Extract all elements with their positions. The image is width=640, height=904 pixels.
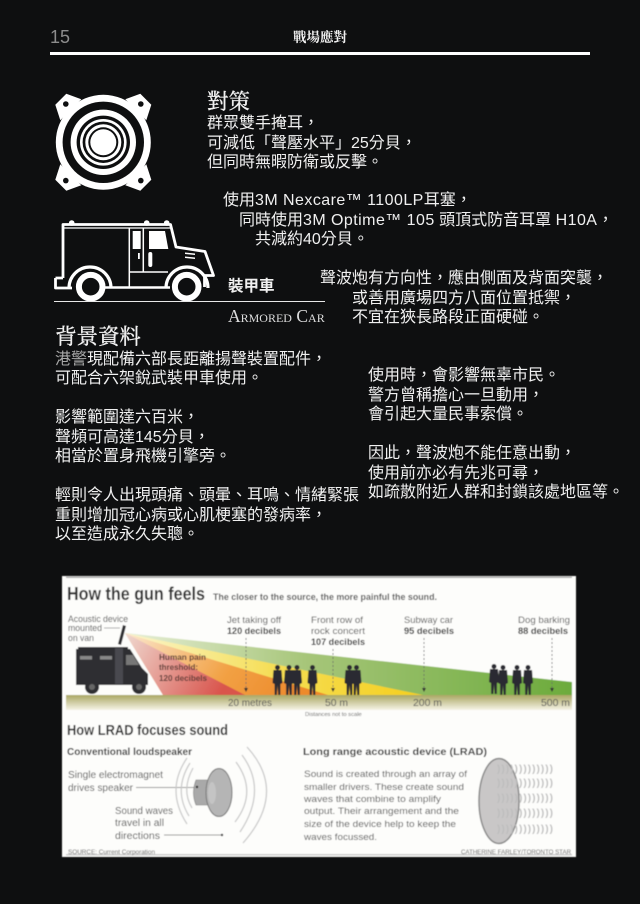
conventional speaker labels: Single electromagnet xyxy=(68,770,163,781)
heading: background: 背景資料 xyxy=(55,325,141,349)
graphic title: How the gun feels xyxy=(67,583,205,604)
text block: restrictions xyxy=(368,444,624,501)
graphic background xyxy=(62,576,576,857)
text block: background: 影響範圍達六百米， xyxy=(55,409,199,426)
acoustic device label: on van xyxy=(68,633,94,643)
conventional speaker labels xyxy=(68,770,223,842)
conventional speaker labels: drives speaker xyxy=(68,783,134,794)
LRAD description: output. Their arrangement and the xyxy=(304,806,459,817)
human pain threshold label: Human pain xyxy=(159,652,206,662)
text block: covering ears: 群眾雙手掩耳， xyxy=(207,115,319,132)
conventional speaker labels: travel in all xyxy=(115,818,164,829)
sound cone chart xyxy=(66,633,572,710)
LRAD description: size of the device help to keep the xyxy=(304,819,456,830)
noise source labels: 88 decibels xyxy=(518,626,568,637)
dotted arrows xyxy=(246,638,552,689)
text block: background: 重則增加冠心病或心肌梗塞的發病率， xyxy=(55,506,327,524)
distance labels: 200 m xyxy=(413,697,442,709)
text block: civilians xyxy=(368,366,560,423)
text block: covering ears: 可減低「聲壓水平」25分貝， xyxy=(207,134,417,152)
heading: how LRAD focuses sound: How LRAD focuses sound xyxy=(67,723,228,739)
subheading: LRAD: Long range acoustic device (LRAD) xyxy=(303,746,487,758)
text block: ear plugs: 同時使用3M Optime™ 105 頭頂式防音耳罩 H10A， xyxy=(239,212,613,228)
noise source labels: Dog barking xyxy=(518,615,570,626)
text block: directional: 不宜在狹長路段正面硬碰。 xyxy=(352,309,544,326)
header rule xyxy=(50,52,590,55)
LRAD description: smaller drivers. These create sound xyxy=(304,782,464,793)
text block: civilians: 會引起大量民事索償。 xyxy=(368,406,528,423)
text block: civilians: 警方曾稱擔心一旦動用， xyxy=(368,386,544,404)
noise source labels xyxy=(227,615,570,648)
icon: LRAD dish xyxy=(479,758,553,844)
text block: covering ears: 但同時無暇防衛或反擊。 xyxy=(207,154,383,171)
conventional speaker labels: directions xyxy=(115,831,160,842)
icon: LRAD dish: ))))))))))))) xyxy=(497,793,553,804)
noise source labels: Front row of xyxy=(311,615,363,626)
distance labels xyxy=(228,697,570,709)
author credit: CATHERINE FARLEY/TORONTO STAR xyxy=(461,850,572,856)
label: armored car Chinese: 裝甲車 xyxy=(228,278,275,295)
text block: civilians: 使用時，會影響無辜市民。 xyxy=(368,367,560,384)
noise source labels: Subway car xyxy=(404,615,453,626)
human pain threshold label xyxy=(159,652,207,683)
source credit: SOURCE: Current Corporation xyxy=(68,850,155,856)
noise source labels: rock concert xyxy=(311,626,365,637)
text block: directional: 或善用廣場四方八面位置抵禦， xyxy=(352,290,576,306)
distance labels: 50 m xyxy=(325,697,348,709)
label: armored car English: Armored Car xyxy=(228,306,325,326)
distance labels: 500 m xyxy=(541,697,570,709)
icon: LRAD dish: ))))))))))))) xyxy=(497,764,553,775)
human pain threshold label: 120 decibels xyxy=(159,673,207,683)
text block: directional xyxy=(320,269,608,326)
text block: background: 可配合六架銳武裝甲車使用。 xyxy=(55,370,263,387)
icon: loudspeaker xyxy=(55,94,152,191)
noise source labels: 107 decibels xyxy=(311,637,365,648)
silhouettes of people xyxy=(272,664,533,695)
graphic title xyxy=(67,583,437,604)
LRAD description: waves that combine to amplify xyxy=(303,794,441,805)
acoustic device label: mounted xyxy=(68,623,102,633)
icon: conventional speaker xyxy=(176,747,267,843)
conventional speaker labels: Sound waves xyxy=(115,806,173,817)
text block: background: 輕則令人出現頭痛、頭暈、耳鳴、情緒緊張 xyxy=(55,487,359,504)
LRAD description: Sound is created through an array of xyxy=(304,769,467,780)
LRAD description xyxy=(303,769,467,843)
acoustic device label: Acoustic device xyxy=(68,614,128,624)
scale note: Distances not to scale xyxy=(305,712,362,718)
noise source labels: Jet taking off xyxy=(227,615,281,626)
acoustic device label xyxy=(68,614,128,643)
text block: ear plugs: 共減約40分貝。 xyxy=(255,231,369,248)
text block: background: 以至造成永久失聰。 xyxy=(55,526,199,543)
icon: armored car xyxy=(54,220,215,301)
distance labels: 20 metres xyxy=(228,697,272,709)
text block: ear plugs xyxy=(223,191,613,248)
text block: background: 相當於置身飛機引擎旁。 xyxy=(55,448,231,465)
page heading: 戰場應對 xyxy=(293,30,347,45)
text block: covering ears xyxy=(207,114,417,171)
LRAD description: waves focussed. xyxy=(303,832,377,843)
subheading: conventional loudspeaker: Conventional loudspeaker xyxy=(67,746,192,758)
text block: restrictions: 如疏散附近人群和封鎖該處地區等。 xyxy=(368,484,624,501)
rule under armored car xyxy=(54,300,325,302)
icon: LRAD dish: ))))))))))))) xyxy=(497,778,553,789)
text block: directional: 聲波炮有方向性，應由側面及背面突襲， xyxy=(320,270,608,287)
text block: restrictions: 使用前亦必有先兆可尋， xyxy=(368,464,544,482)
icon: LRAD dish: ))))))))))))) xyxy=(497,824,553,835)
van illustration xyxy=(76,625,148,694)
text block: ear plugs: 使用3M Nexcare™ 1100LP耳塞， xyxy=(223,192,472,209)
heading: countermeasures: 對策 xyxy=(207,90,250,114)
text block: background xyxy=(55,350,359,543)
noise source labels: 95 decibels xyxy=(404,626,454,637)
noise source labels: 120 decibels xyxy=(227,626,281,637)
icon: LRAD dish: ))))))))))))) xyxy=(497,808,553,819)
text block: restrictions: 因此，聲波炮不能任意出動， xyxy=(368,445,576,462)
page number: 15 xyxy=(50,27,70,47)
human pain threshold label: threshold: xyxy=(159,662,198,672)
graphic title: The closer to the source, the more painful the sound. xyxy=(213,592,437,603)
text block: background: 港警現配備六部長距離揚聲裝置配件， xyxy=(55,350,327,368)
text block: background: 聲頻可高達145分貝， xyxy=(55,428,210,446)
